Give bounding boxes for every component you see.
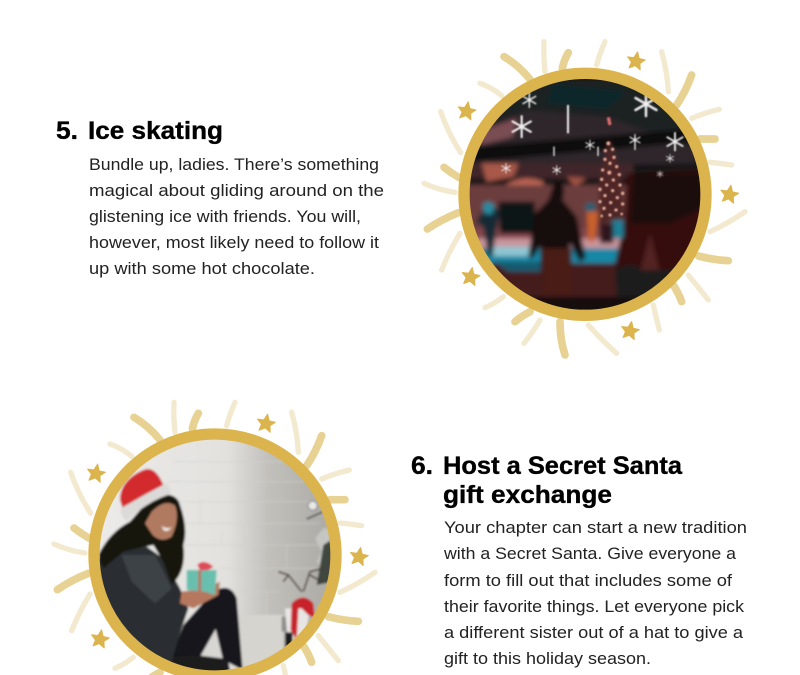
text block: secret santa description: gift to this holiday season. [444, 650, 651, 668]
text block: ice skating description: magical about gliding around on the [89, 182, 384, 200]
text block: ice skating description: however, most likely need to follow it [89, 234, 379, 252]
photo: woman holding a gift [100, 440, 330, 670]
hand [180, 582, 220, 608]
tree [315, 528, 330, 565]
icon: gold rays [54, 402, 375, 675]
text block: secret santa description: their favorite things. Let everyone pick [444, 598, 745, 616]
photo: ice skaters under lights [463, 73, 707, 317]
heading: 6. Host a Secret Santa gift exchange: 6. [411, 452, 433, 480]
gift [187, 570, 217, 595]
text block: secret santa description: form to fill out that includes some of [444, 572, 732, 590]
text block: ice skating description [89, 156, 384, 278]
text block: secret santa description: Your chapter can start a new tradition [444, 519, 747, 537]
icon: gold stars [86, 413, 369, 648]
circular photo: ice rink with gold rays and stars [424, 42, 745, 355]
tree lights [598, 141, 624, 217]
hair [98, 495, 185, 584]
heading: 6. Host a Secret Santa gift exchange: Host a Secret Santa [443, 452, 683, 480]
text block: ice skating description: up with some hot chocolate. [89, 260, 315, 278]
sweater [90, 547, 188, 662]
gold ring [464, 73, 706, 315]
skaters [498, 202, 535, 233]
icon: gold stars [456, 50, 740, 340]
legs [170, 588, 243, 672]
heading: 5. Ice skating: Ice skating [88, 117, 223, 145]
tree [599, 140, 625, 223]
circular photo: woman in Santa hat with gold rays and stars [54, 402, 375, 675]
text block: secret santa description [443, 519, 747, 668]
icon: gold rays [424, 42, 745, 355]
heading: 6. Host a Secret Santa gift exchange: gift exchange [443, 481, 612, 509]
central skater [528, 180, 586, 297]
snowflake decorations [502, 92, 683, 177]
text block: secret santa description: with a Secret Santa. Give everyone a [443, 545, 737, 563]
face [145, 503, 177, 540]
heading: 6. Host a Secret Santa gift exchange [411, 452, 683, 509]
heading: 5. Ice skating: 5. [56, 117, 78, 145]
gold ring [94, 434, 336, 675]
hat [120, 469, 163, 510]
text block: ice skating description: Bundle up, ladies. There’s something [89, 156, 379, 174]
text block: secret santa description: a different sister out of a hat to give a [444, 624, 744, 642]
reindeer [278, 568, 323, 592]
text block: ice skating description: glistening ice with friends. You will, [89, 208, 361, 226]
